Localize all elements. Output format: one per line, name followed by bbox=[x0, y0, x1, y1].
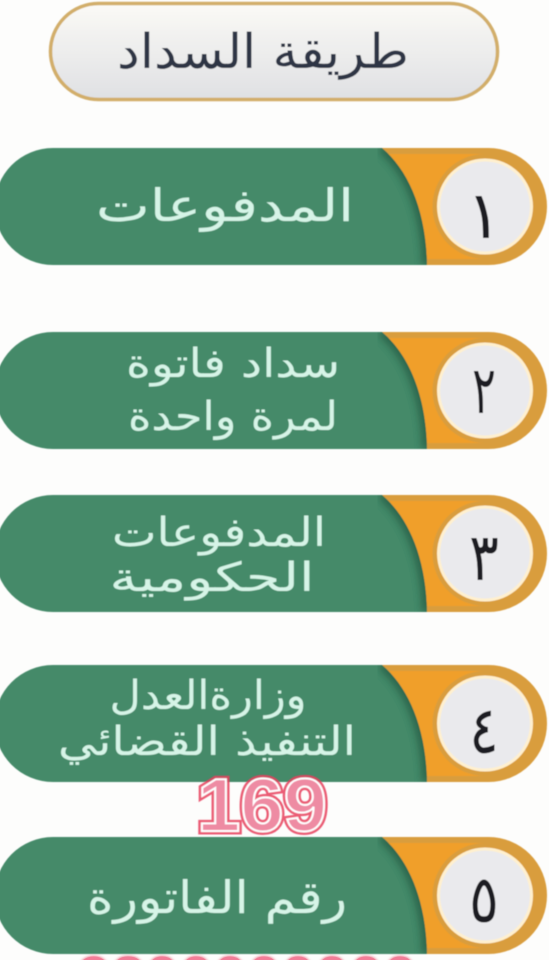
row 3 bbox=[0, 495, 547, 612]
row 2 label second line: لمرة واحدة bbox=[128, 394, 338, 440]
row 4 label: وزارةالعدل bbox=[110, 673, 306, 719]
row 4 label second line: التنفيذ القضائي bbox=[58, 719, 356, 765]
title text: طريقة السداد bbox=[117, 24, 409, 80]
row 1 number: ١ bbox=[466, 177, 502, 254]
row 2 number: ٢ bbox=[472, 352, 496, 429]
row 3 label second line: الحكومية bbox=[110, 555, 314, 601]
row 5 bbox=[0, 837, 547, 954]
title pill bbox=[50, 4, 498, 100]
row 5 label: رقم الفاتورة bbox=[87, 871, 347, 924]
row 1 label: المدفوعات bbox=[96, 179, 354, 232]
pink number 169: 169 bbox=[197, 763, 327, 847]
row 3 number: ٣ bbox=[469, 519, 499, 596]
pink number 169: 169 bbox=[197, 763, 327, 847]
row 1 bbox=[0, 148, 547, 265]
row 2 label: سداد فاتوة bbox=[126, 341, 340, 387]
row 3 label: المدفوعات bbox=[112, 510, 326, 556]
row 4 number: ٤ bbox=[469, 692, 499, 769]
row 4 bbox=[0, 665, 547, 782]
row 5 number: ٥ bbox=[469, 861, 499, 938]
row 2 bbox=[0, 332, 547, 449]
